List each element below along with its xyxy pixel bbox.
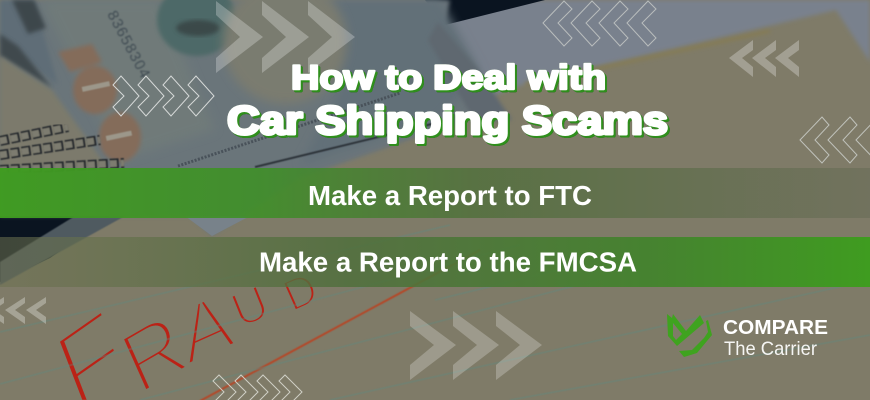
bill edge tip under band xyxy=(185,216,250,236)
arrows: large solid chevrons top xyxy=(216,1,355,73)
serial numbers on bill: 83658304 xyxy=(103,8,154,82)
bill serrated edges xyxy=(178,93,400,166)
band: make a report to the FMCSA xyxy=(0,237,870,287)
notepad rule lines xyxy=(0,225,870,400)
band: make a report to FTC xyxy=(0,168,870,218)
stamp highlights xyxy=(82,81,132,141)
dark desk corner xyxy=(425,0,545,25)
desk surface xyxy=(430,0,870,100)
arrows: outlined chevrons top right xyxy=(543,1,656,46)
wordmark COMPARE: COMPARE xyxy=(723,317,828,339)
arrows: solid chevrons lower left xyxy=(0,297,46,324)
title xyxy=(227,59,668,143)
bill left pale tone xyxy=(40,0,215,160)
arrows: large solid chevrons bottom xyxy=(410,311,542,380)
portrait seal xyxy=(157,0,237,56)
FRAUD handwriting xyxy=(60,278,314,400)
logo: Compare The Carrier xyxy=(667,314,828,360)
arrows: outlined chevrons left xyxy=(113,76,214,116)
blue-grey bill band behind title xyxy=(300,0,480,165)
tan bill fold xyxy=(0,56,108,168)
arrows: outlined chevrons right edge xyxy=(800,117,870,163)
dark shadow lower left xyxy=(0,216,110,282)
blue bill corner xyxy=(0,0,58,85)
bill stack edge xyxy=(0,216,125,285)
engraved script rows on bill xyxy=(0,127,124,170)
pale portrait circle xyxy=(223,0,347,104)
title line 2: Car Shipping Scams xyxy=(227,99,668,143)
arrows: solid chevrons upper right xyxy=(729,40,799,77)
wordmark The Carrier: The Carrier xyxy=(724,338,817,360)
icon: green shield check xyxy=(667,314,712,357)
title line 1: How to Deal with xyxy=(291,59,606,97)
bill fold shadow xyxy=(12,0,46,34)
red underline xyxy=(200,250,480,400)
orange bank stamp xyxy=(58,44,141,162)
band: make a report to the FMCSA: Make a Report to the FMCSA xyxy=(259,246,637,278)
band: make a report to FTC: Make a Report to FTC xyxy=(308,180,592,211)
bill right shaded strip xyxy=(428,22,512,122)
notepad edge stain xyxy=(525,31,770,84)
dollar bills xyxy=(0,0,500,236)
arrows: outlined chevrons bottom xyxy=(213,375,302,400)
